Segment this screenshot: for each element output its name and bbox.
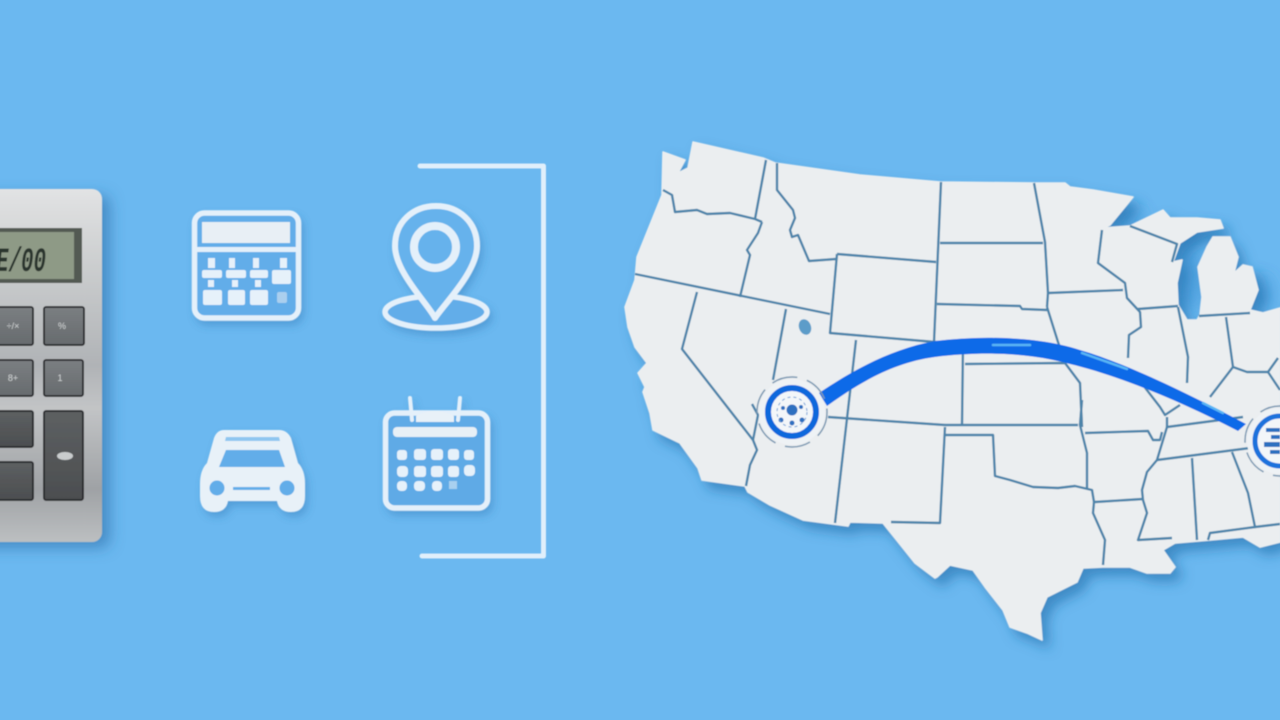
calculator	[0, 189, 102, 542]
marker emblem	[1264, 428, 1280, 454]
calculator keys: ÷/×	[7, 321, 19, 331]
icon: calculator outline	[194, 213, 298, 318]
destination marker	[1245, 406, 1280, 476]
origin marker	[757, 377, 827, 447]
illustration artwork	[0, 142, 1280, 640]
marker emblem	[777, 397, 807, 427]
calculator keys: 8+	[8, 373, 18, 383]
calculator keys	[0, 307, 84, 500]
state borders	[635, 160, 1280, 565]
arc highlights	[993, 345, 1223, 413]
bracket around icons	[420, 166, 544, 556]
icon: calendar	[386, 398, 488, 508]
calculator keys: %	[58, 321, 66, 331]
route arc	[819, 338, 1246, 431]
icon: location pin	[385, 206, 487, 328]
icon: car	[200, 430, 305, 512]
lake in Utah	[797, 317, 813, 337]
map landmass	[625, 142, 1280, 640]
map of the United States	[625, 142, 1280, 640]
calculator keys: 1	[57, 373, 63, 383]
lake shadows	[1112, 209, 1271, 313]
calculator display	[0, 228, 82, 283]
